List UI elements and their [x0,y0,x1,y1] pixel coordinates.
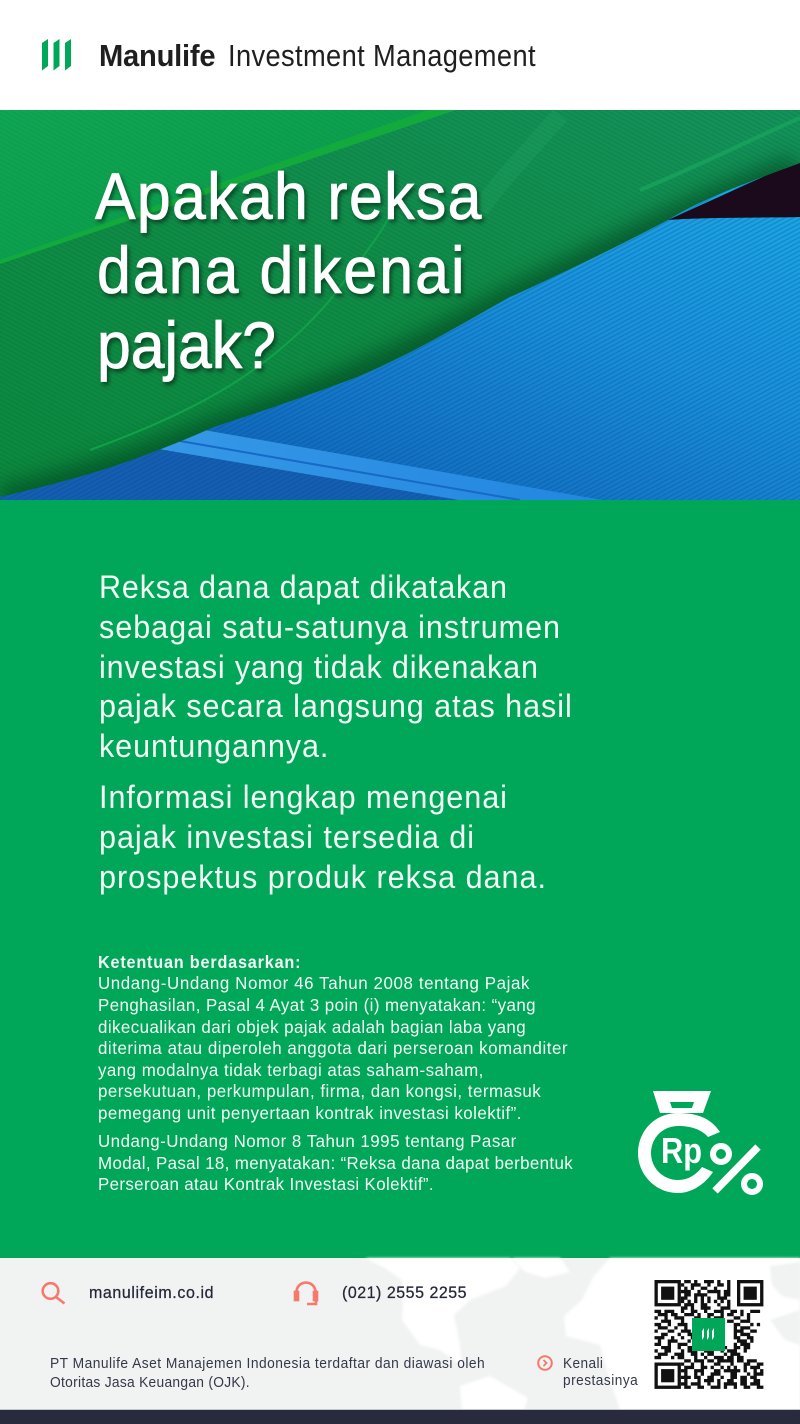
bottom dark bar [0,1409,800,1424]
legal basis text: persekutuan, perkumpulan, firma, dan kongsi, termasuk [98,1081,541,1101]
icon: headset [295,1283,317,1304]
intro paragraph: investasi yang tidak dikenakan [99,648,538,685]
performance link label: Kenali [563,1355,603,1371]
legal basis text: Perseroan atau Kontrak Investasi Kolektif”. [98,1174,434,1194]
intro paragraph: pajak secara langsung atas hasil [99,687,572,724]
regulator disclaimer [50,1356,485,1391]
legal basis text: Ketentuan berdasarkan: [98,952,301,972]
legal basis text: Undang-Undang Nomor 46 Tahun 2008 tentang Pajak [98,973,530,993]
phone number: (021) 2555 2255 [342,1284,467,1302]
logo wordmark: Investment Management [228,39,536,73]
hero feather image [0,110,800,503]
info paragraph [99,778,546,895]
logo wordmark [99,39,536,73]
intro paragraph: Reksa dana dapat dikatakan [99,568,507,605]
icon: money bag with Rp and percent [638,1091,760,1193]
intro paragraph [99,568,572,764]
title: Apakah reksa [95,161,482,234]
info paragraph: Informasi lengkap mengenai [99,778,507,815]
green content panel [0,500,800,1258]
website link: manulifeim.co.id [89,1284,214,1302]
icon: Manulife logo bars [42,39,71,70]
regulator disclaimer: Otoritas Jasa Keuangan (OJK). [50,1375,250,1391]
regulator disclaimer: PT Manulife Aset Manajemen Indonesia terdaftar dan diawasi oleh [50,1356,485,1372]
legal basis text: Modal, Pasal 18, menyatakan: “Reksa dana dapat berbentuk [98,1153,573,1173]
legal basis text: Undang-Undang Nomor 8 Tahun 1995 tentang Pasar [98,1131,516,1151]
icon: arrow circle [538,1356,552,1370]
legal basis text: yang modalnya tidak terbagi atas saham-saham, [98,1060,483,1080]
intro paragraph: sebagai satu-satunya instrumen [99,608,560,645]
QR centre logo badge [692,1318,725,1351]
legal basis text: dikecualikan dari objek pajak adalah bagian laba yang [98,1017,526,1037]
icon: money bag with Rp and percent: Rp [661,1130,702,1171]
performance link label [563,1355,638,1388]
performance link label: prestasinya [563,1372,638,1388]
intro paragraph: keuntungannya. [99,727,328,764]
title [95,161,482,383]
icon: search [43,1283,64,1304]
QR code [650,1276,767,1393]
legal basis text: Penghasilan, Pasal 4 Ayat 3 poin (i) menyatakan: “yang [98,995,536,1015]
legal basis text: pemegang unit penyertaan kontrak investasi kolektif”. [98,1103,521,1123]
header band [0,0,800,110]
footer background with world map [0,1258,800,1410]
title: pajak? [97,310,276,383]
title: dana dikenai [97,235,465,308]
info paragraph: prospektus produk reksa dana. [99,858,546,895]
legal basis text: diterima atau diperoleh anggota dari perseroan komanditer [98,1038,568,1058]
info paragraph: pajak investasi tersedia di [99,818,474,855]
logo wordmark: Manulife [99,39,216,73]
legal basis text [98,952,573,1194]
